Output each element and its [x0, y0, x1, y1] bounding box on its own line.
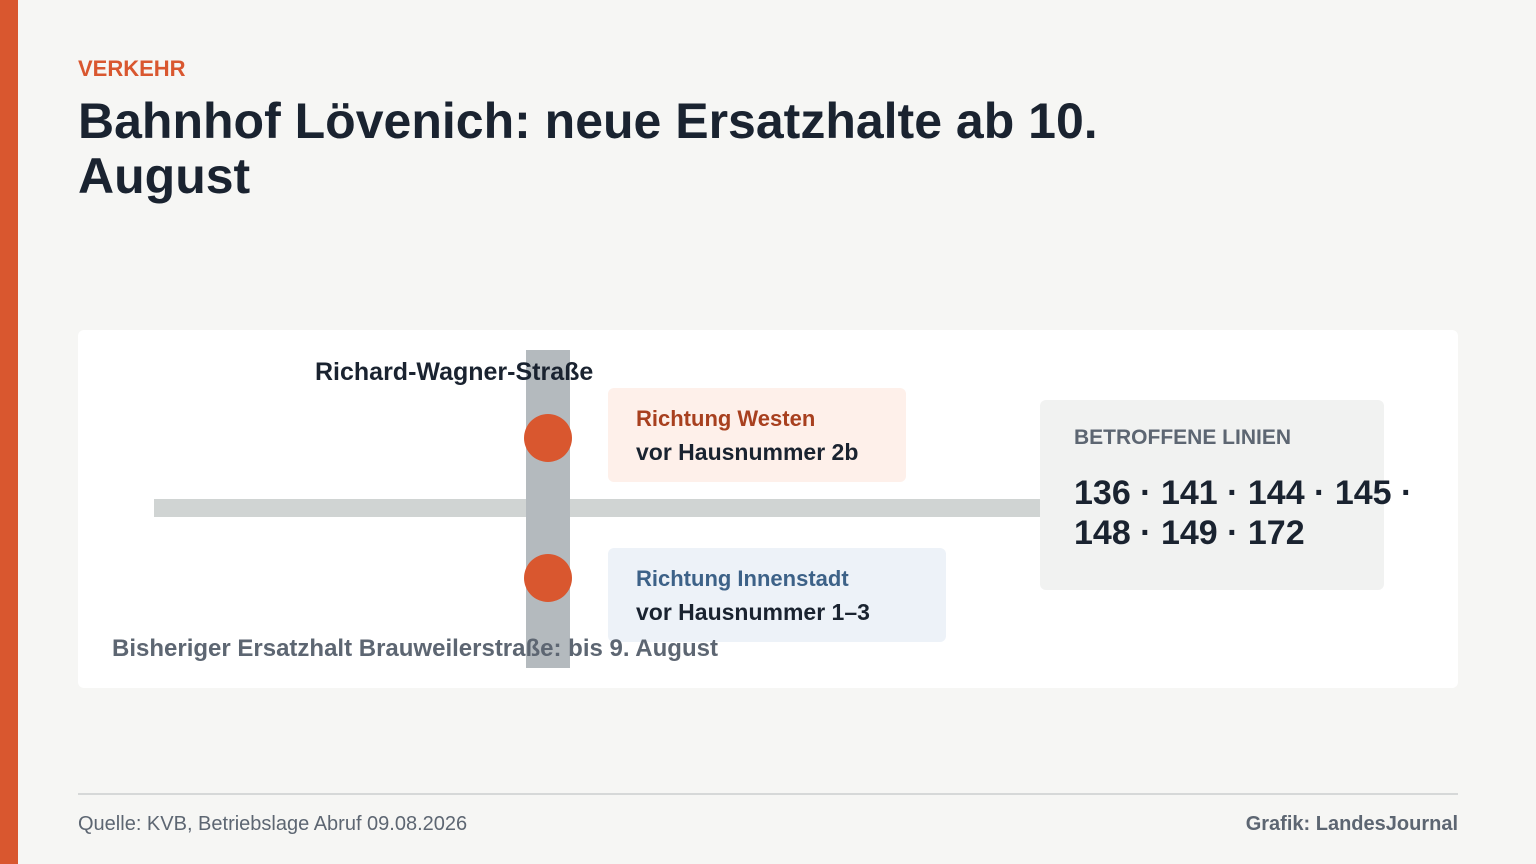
line numbers: 148 · 149 · 172 — [1074, 514, 1305, 552]
callout text west: vor Hausnummer 2b — [636, 439, 858, 465]
callout: Richtung Innenstadt — [608, 548, 946, 642]
callout text city centre: vor Hausnummer 1–3 — [636, 599, 870, 625]
note: previous stop: Bisheriger Ersatzhalt Brauweilerstraße: bis 9. August — [112, 635, 718, 662]
stop marker: city centre — [524, 554, 572, 602]
callout heading west: Richtung Westen — [636, 406, 815, 431]
panel: map diagram — [78, 330, 1458, 688]
accent bar — [0, 0, 18, 864]
title — [78, 93, 1098, 204]
affected lines heading: BETROFFENE LINIEN — [1074, 426, 1291, 449]
street label: Richard-Wagner-Straße: Richard-Wagner-Straße — [315, 358, 593, 386]
panel: affected lines — [1040, 400, 1384, 590]
callout heading city centre: Richtung Innenstadt — [636, 566, 849, 591]
horizontal road — [154, 499, 1040, 517]
source: Quelle: KVB, Betriebslage Abruf 09.08.2026 — [78, 813, 467, 835]
stop marker: west — [524, 414, 572, 462]
footer rule — [78, 793, 1458, 795]
kicker: Verkehr: VERKEHR — [78, 56, 186, 81]
title: August — [78, 148, 250, 204]
credit: Grafik: LandesJournal — [1246, 813, 1458, 835]
line numbers: 136 · 141 · 144 · 145 · — [1074, 474, 1412, 512]
line numbers — [1074, 474, 1412, 552]
callout: Richtung Westen — [608, 388, 906, 482]
vertical road — [526, 350, 570, 668]
title: Bahnhof Lövenich: neue Ersatzhalte ab 10. — [78, 93, 1098, 149]
